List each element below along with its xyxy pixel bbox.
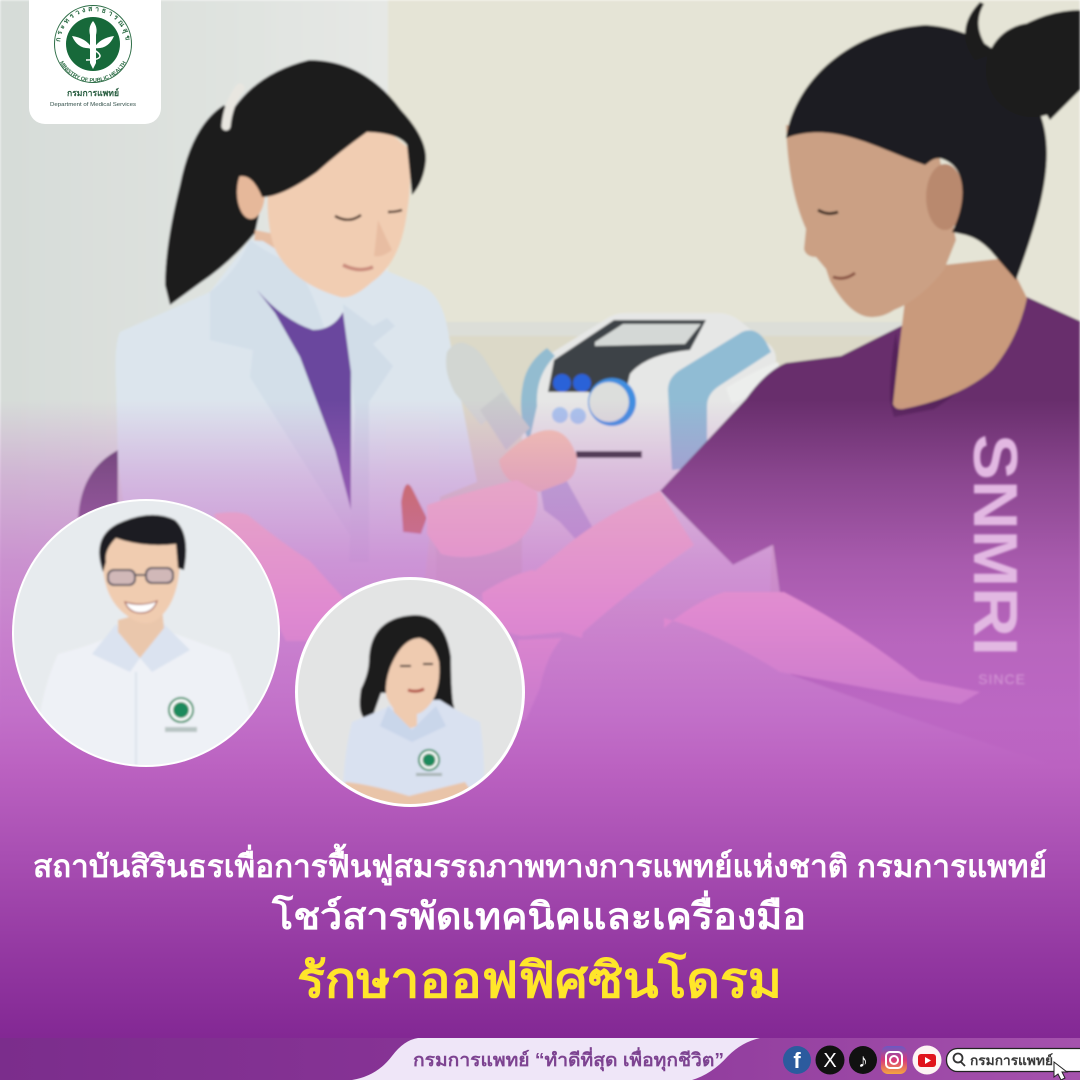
patient ear [926,164,964,230]
doctor neck [252,230,363,340]
footer band [0,1038,1080,1080]
smile [125,601,157,613]
icon: X: X [823,1050,837,1072]
ministry seal [54,5,132,83]
search pill: กรมการแพทย์ [970,1053,1053,1068]
shirt [35,630,260,774]
portrait: male doctor [10,495,280,775]
neck [118,608,164,658]
face [103,535,180,623]
doctor face [268,115,410,297]
badge [419,750,439,770]
patient hand [482,570,584,638]
icon: youtube [912,1046,942,1074]
patient eye and mouth [818,210,855,278]
ministry seal: กระทรวงสาธารณสุข [56,6,130,42]
patient second forearm [518,638,562,720]
search pill [946,1048,1080,1072]
patient neck [893,258,1027,409]
icon: tiktok [849,1046,877,1074]
right lapel [343,304,395,562]
patient hair bun [965,2,1080,120]
heading: highlight: รักษาออฟฟิศซินโดรม [297,951,782,1008]
hair [360,615,454,729]
pocket [385,410,440,543]
icon: facebook: f [793,1048,801,1073]
shirt [344,698,484,796]
doctor ear [237,165,265,219]
doctor forearm [427,480,538,557]
treatment handpiece [446,343,594,542]
left lapel [210,240,353,540]
slogan ribbon [352,1038,760,1080]
collar [380,706,446,742]
icon: tiktok: ♪ [858,1051,868,1072]
patient shirt [660,294,1080,775]
heading: institute name: สถาบันสิรินธรเพื่อการฟื้นฟูสมรรถภาพทางการแพทย์แห่งชาติ กรมการแพทย์ [33,843,1047,886]
icon: instagram [881,1046,907,1074]
chair behind doctor [78,450,118,520]
glasses [108,568,173,585]
doctor purple shirt [257,290,351,510]
ministry seal: MINISTRY OF PUBLIC HEALTH [60,60,126,82]
pink arms and hands [214,480,980,720]
heading: subtitle: โชว์สารพัดเทคนิคและเครื่องมือ [271,890,806,937]
doctor ponytail [165,105,270,305]
doctor eyes and mouth [335,210,402,270]
patient hair [786,25,1047,280]
badge [169,698,193,722]
patient face [786,125,956,317]
doctor hair clip [226,88,240,126]
doctor coat [116,240,477,632]
cursor icon [1054,1062,1067,1080]
department name: กรมการแพทย์ [67,87,119,98]
arms [344,781,470,804]
logo card [29,0,161,124]
doctor hair [208,60,426,227]
treatment machine [521,313,782,600]
icon: facebook [783,1046,811,1074]
patient shirt print: SINCE [978,671,1026,687]
patient shirt print: SNMRI [960,434,1029,656]
icon: X [816,1046,844,1074]
slogan text: กรมการแพทย์ “ทำดีที่สุด เพื่อทุกชีวิต” [413,1047,724,1072]
face and neck [386,638,439,732]
portrait: female doctor [295,575,525,812]
doctor left arm [214,512,346,641]
doctor hand [499,430,577,492]
patient arm [530,491,694,635]
hair [99,515,186,572]
logo card: Department of Medical Services [50,102,136,108]
patient second hand and forearm [664,592,980,704]
